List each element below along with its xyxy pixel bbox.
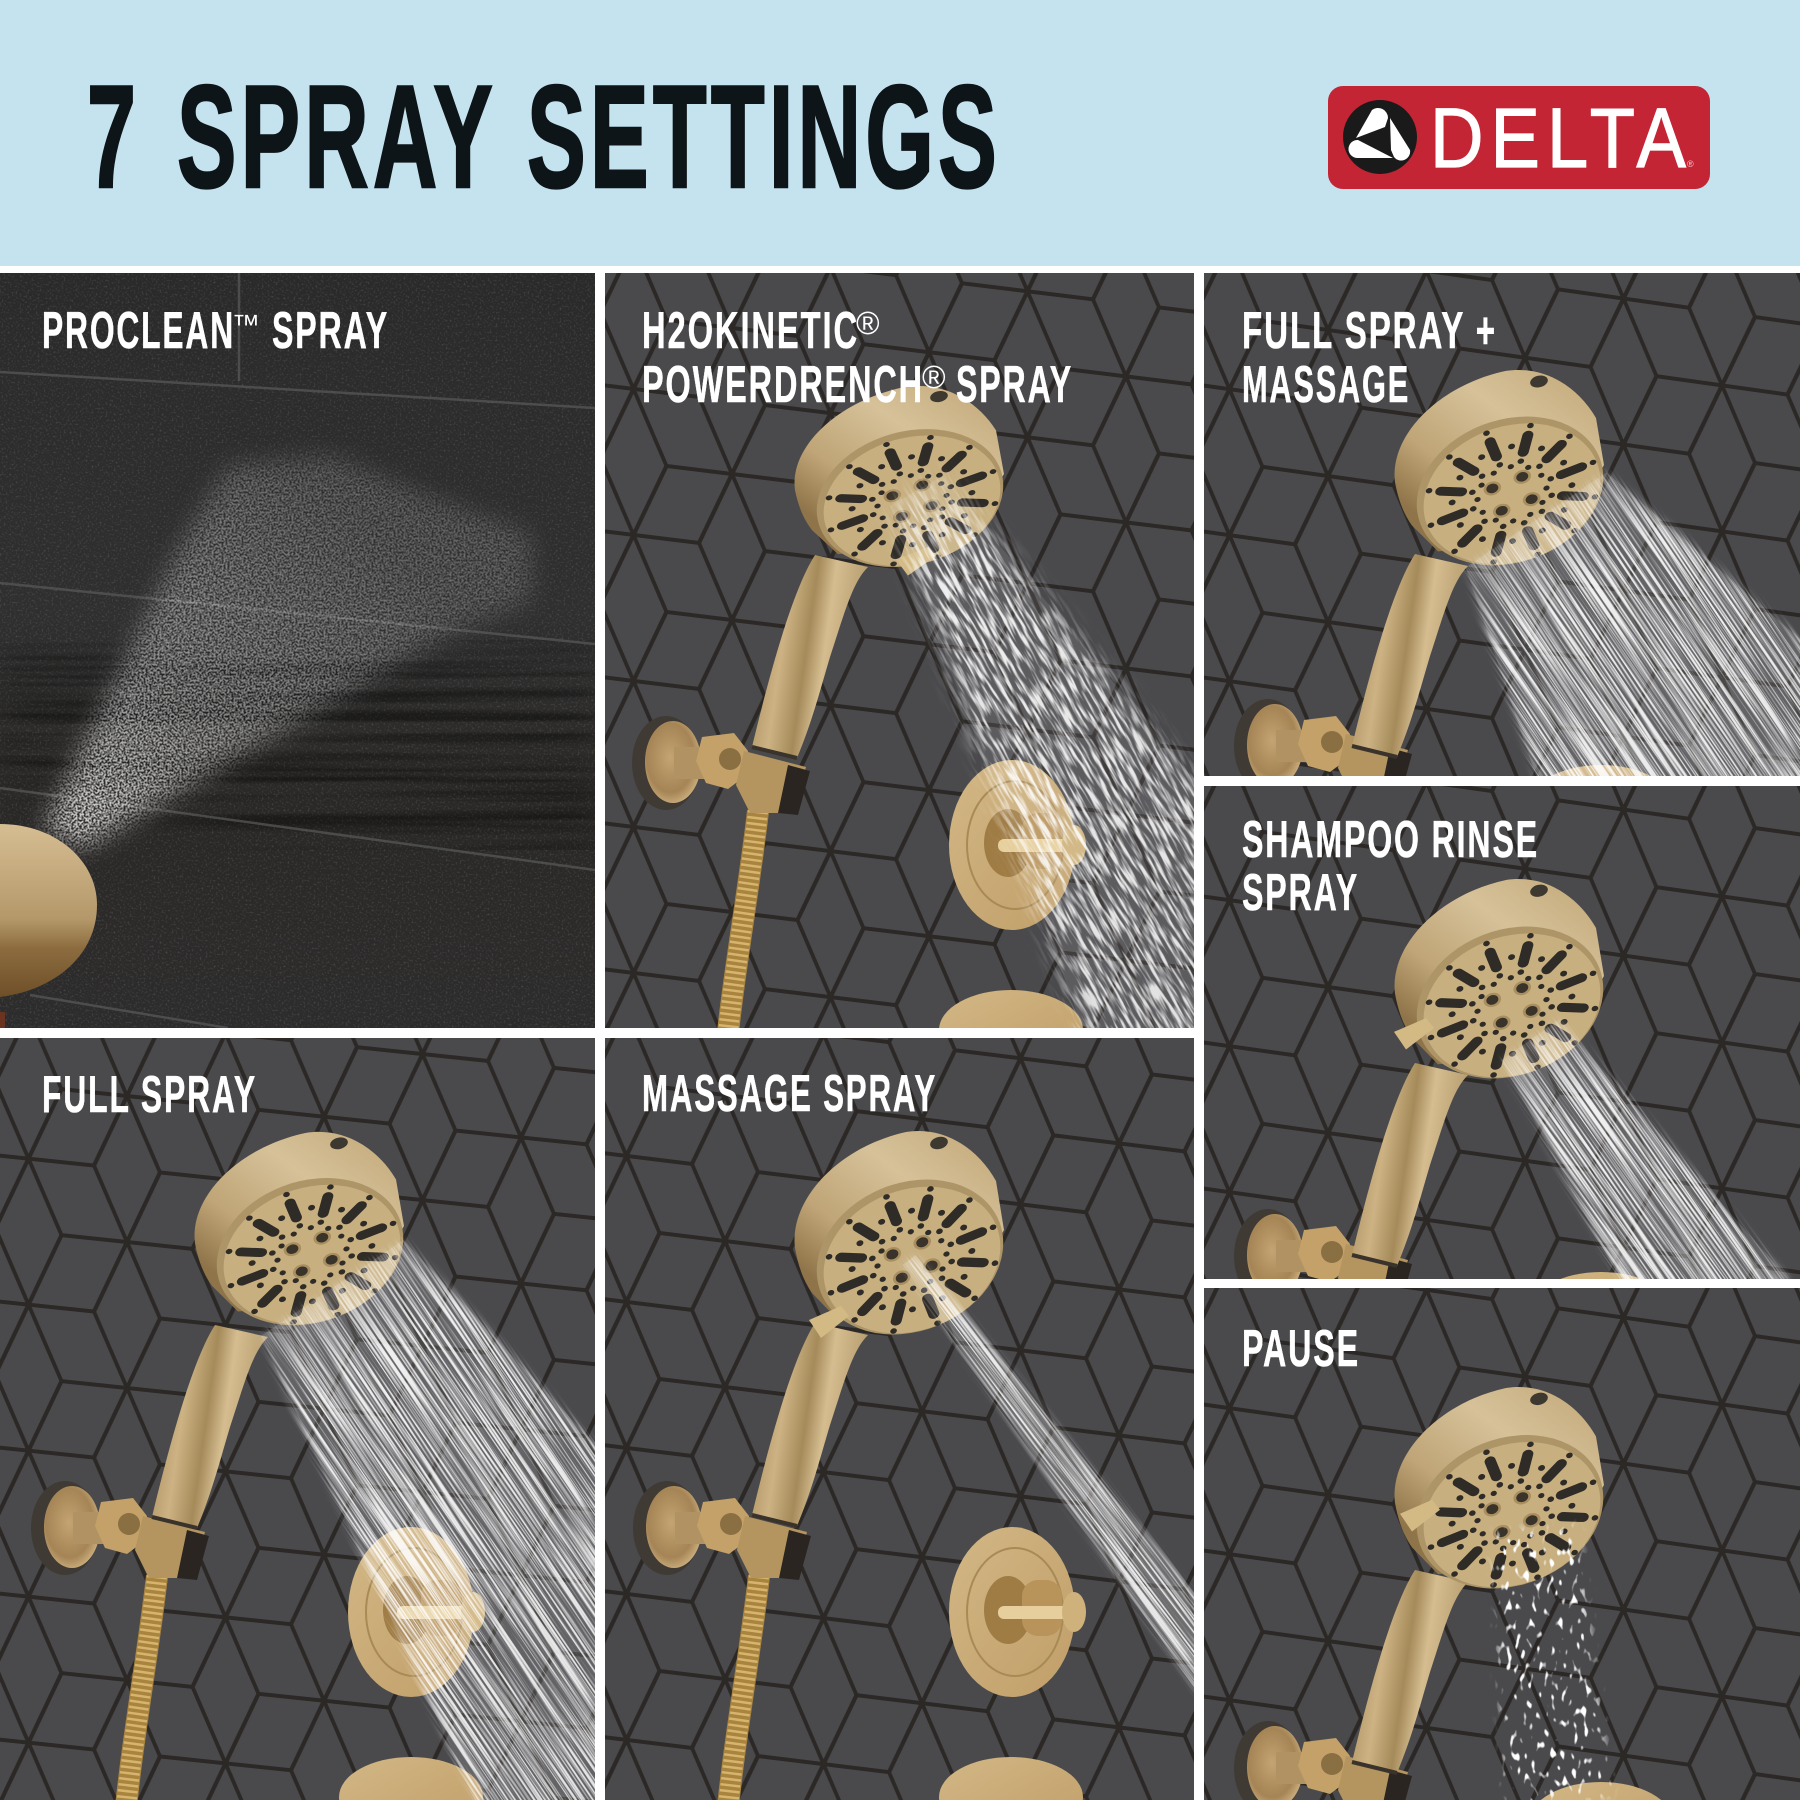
panel: Massage spray bbox=[605, 1038, 1246, 1800]
label: H2OKINETIC bbox=[642, 302, 859, 360]
icon: wall bracket bbox=[1234, 1209, 1412, 1279]
label: ® bbox=[856, 305, 880, 341]
logo: Delta: DELTA bbox=[1430, 91, 1693, 185]
panel: H2Okinetic PowerDrench spray bbox=[605, 273, 1194, 1028]
icon: shower head side bbox=[0, 824, 97, 1028]
label: ® bbox=[922, 359, 946, 395]
label: SHAMPOO RINSE bbox=[1242, 811, 1539, 869]
water jet bbox=[885, 1242, 1246, 1693]
icon: tub valve top bbox=[1552, 765, 1650, 776]
icon: wall bracket bbox=[1234, 699, 1412, 776]
label: MASSAGE bbox=[1242, 356, 1410, 414]
icon: valve bbox=[348, 1527, 485, 1697]
icon: tub spout bbox=[339, 1757, 483, 1800]
panel: Pause bbox=[1204, 1288, 1800, 1800]
label: PROCLEAN bbox=[42, 302, 235, 360]
label bbox=[1242, 820, 1536, 911]
icon: handle bbox=[152, 1325, 268, 1528]
icon: tub spout bbox=[939, 990, 1083, 1028]
icon: tub spout top bbox=[1529, 1782, 1673, 1800]
label: FULL SPRAY bbox=[42, 1066, 257, 1124]
title: SETTINGS bbox=[527, 55, 1001, 218]
icon: shower head bbox=[1394, 370, 1604, 566]
water drips bbox=[1483, 1525, 1610, 1800]
icon: tub spout top bbox=[1560, 1272, 1641, 1279]
label: ™ bbox=[232, 309, 260, 340]
title: SPRAY bbox=[177, 55, 497, 218]
icon: shower head bbox=[1393, 1387, 1627, 1615]
title: 7 bbox=[87, 55, 136, 218]
panel: ProClean spray bbox=[0, 273, 595, 1028]
water spray bbox=[1464, 469, 1800, 776]
icon: shower head bbox=[193, 1132, 427, 1351]
logo: Delta bbox=[1328, 86, 1710, 189]
icon: handle bbox=[1352, 1063, 1468, 1266]
icon: wall bracket and hose bbox=[31, 1481, 209, 1800]
icon: shower head bbox=[794, 386, 1004, 576]
icon: wall bracket and hose bbox=[633, 1481, 811, 1800]
icon: shower head bbox=[793, 1131, 1027, 1362]
water spray bbox=[884, 469, 1194, 1028]
icon: shower head bbox=[1394, 879, 1604, 1078]
icon: handle bbox=[1352, 1570, 1468, 1773]
panel: Full spray + massage bbox=[1204, 273, 1800, 776]
header band bbox=[0, 0, 1800, 266]
label: SPRAY bbox=[1242, 864, 1359, 922]
icon: handle bbox=[752, 555, 868, 758]
panel: Full spray bbox=[0, 1038, 595, 1800]
label: SPRAY bbox=[956, 356, 1073, 414]
icon: wall bracket bbox=[1234, 1721, 1412, 1800]
icon: valve bbox=[949, 760, 1086, 930]
icon: valve bbox=[949, 1527, 1086, 1697]
label: PAUSE bbox=[1242, 1320, 1360, 1378]
icon: tub spout bbox=[939, 1757, 1083, 1800]
label: SPRAY bbox=[272, 302, 389, 360]
label: POWERDRENCH bbox=[642, 356, 924, 414]
mist spray bbox=[44, 455, 531, 848]
label bbox=[644, 311, 1071, 403]
water spray bbox=[1500, 1018, 1792, 1279]
panel: Shampoo rinse spray bbox=[1204, 786, 1800, 1279]
icon: handle bbox=[1352, 554, 1468, 757]
water spray bbox=[174, 1182, 847, 1800]
label: MASSAGE SPRAY bbox=[642, 1065, 937, 1123]
icon: handle bbox=[752, 1323, 868, 1526]
logo: Delta: ® bbox=[1687, 159, 1694, 169]
icon: wall bracket and hose bbox=[632, 716, 810, 1053]
title bbox=[87, 55, 1001, 218]
label bbox=[1244, 312, 1494, 403]
label: FULL SPRAY + bbox=[1242, 302, 1497, 360]
label bbox=[44, 311, 387, 349]
